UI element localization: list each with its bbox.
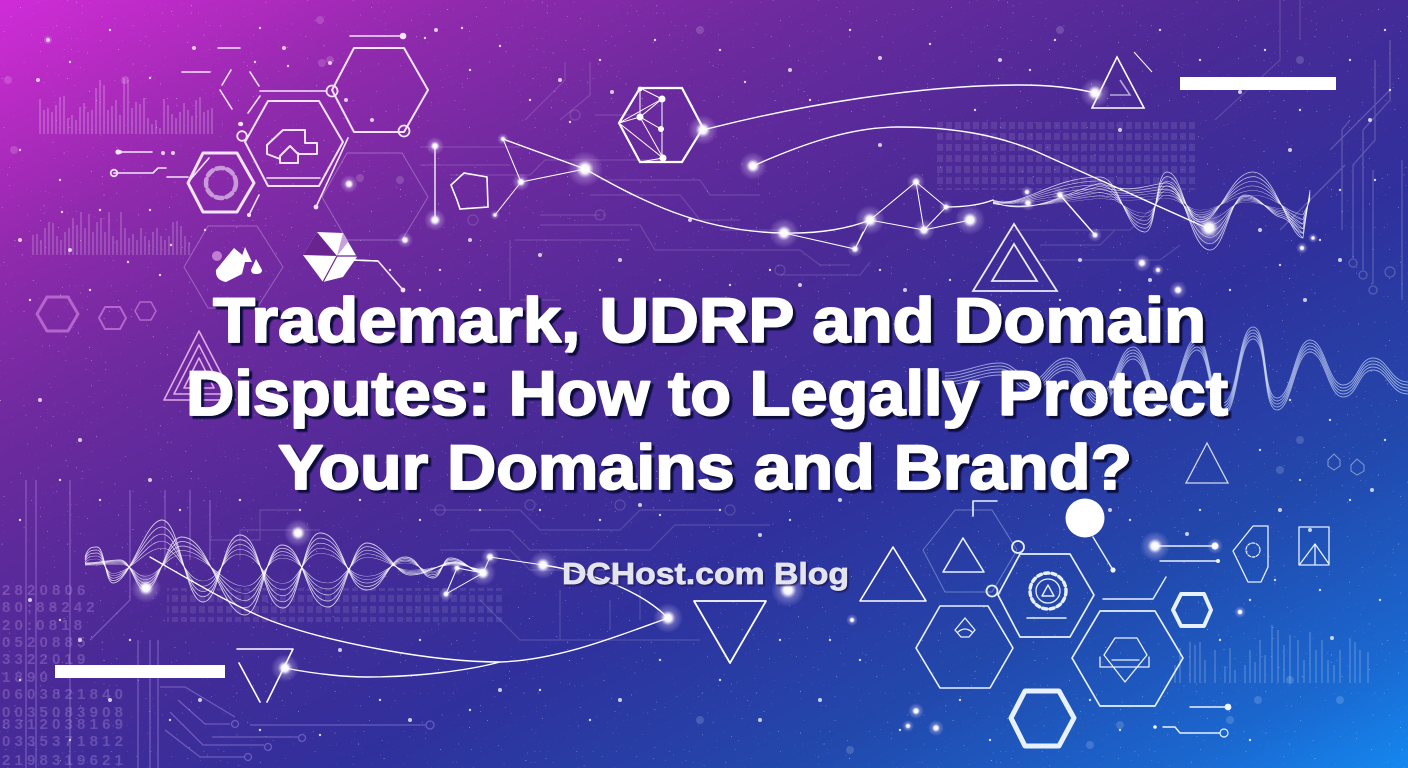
- blob outline: [451, 173, 488, 209]
- inverted triangles bottom: [237, 547, 926, 702]
- faint circuit: top right: [1280, 40, 1402, 300]
- faint digit columns: lower left: 0 0 3 5 0 8 3 9 0 8: [2, 704, 123, 721]
- triangle top right: [1092, 52, 1152, 108]
- glowing nodes: [131, 78, 1318, 736]
- connector lines: [1093, 537, 1228, 733]
- faint hexagons top left: [184, 153, 428, 308]
- wave bundle: top right: [993, 172, 1310, 250]
- icon cluster: bottom right hexagons: [916, 501, 1329, 746]
- signal curves: [503, 85, 1207, 235]
- icon: water drops: [212, 247, 262, 282]
- faint digit columns: lower left: 0 3 3 5 3 7 1 8 1 2: [2, 733, 123, 750]
- title line 1: Trademark, UDRP and Domain: [213, 286, 1206, 356]
- outline hexagons left: [37, 297, 156, 331]
- hexagon with diamond: [1072, 611, 1183, 706]
- faint circuit: lower left: [26, 480, 434, 768]
- connector lines: [114, 36, 403, 290]
- thick hexagons: [1173, 594, 1211, 626]
- faint digit columns: lower left: 0 5 2 0 8 8 5: [2, 634, 85, 651]
- vertical marker with blob: [434, 146, 436, 220]
- title line 2: Disputes: How to Legally Protect: [186, 359, 1228, 429]
- rings: [1012, 541, 1024, 553]
- large white dot: [1066, 498, 1104, 538]
- faint square grid: top right: [935, 120, 1195, 190]
- faint digit columns: lower left: 2 0 : 0 8 1 8: [2, 617, 82, 634]
- triangle center right: [973, 224, 1057, 291]
- hexagon with gear: [998, 554, 1094, 637]
- faint digit columns: lower left: 8 0 ; 8 8 2 4 2: [2, 599, 95, 616]
- subtitle: blog name: DCHost.com Blog: [562, 556, 849, 591]
- shield icon: [1233, 526, 1268, 582]
- icon: segmented hexagon: [303, 232, 378, 282]
- wave bundle: bottom left: [85, 520, 483, 615]
- network: upper center: [435, 85, 1207, 249]
- faint digit columns: lower left: 1 8 9 0: [2, 669, 48, 686]
- faint bar chart: mid left: [33, 212, 189, 255]
- hexagon small thick: [188, 153, 254, 212]
- white bar top right: [1180, 77, 1336, 90]
- node links: [495, 139, 970, 249]
- title: [186, 286, 1228, 503]
- joint rings: [111, 86, 409, 176]
- faint bar chart: upper left: [40, 78, 212, 134]
- faint digit columns: lower left: 8 3 1 2 0 3 8 1 6 9: [2, 716, 123, 733]
- line end dots: top left: [115, 33, 406, 292]
- wave bundle: mid right: [945, 327, 1408, 415]
- outlined triangle right: [1186, 443, 1228, 483]
- faint bar chart: bottom right: [1175, 625, 1368, 683]
- emblem glyph: [267, 130, 317, 163]
- mesh hexagon icon: [619, 87, 703, 162]
- hexagon outline large: [332, 48, 428, 132]
- framed triangle icon: [1299, 527, 1329, 565]
- faint digit columns: lower left: 3 3 2 2 0 1 9: [2, 651, 85, 668]
- end dots: bottom right: [1110, 542, 1231, 729]
- faint digit columns: lower left: 0 6 0 3 8 2 1 8 4 0: [2, 686, 123, 703]
- network: bottom left curves: [150, 557, 668, 677]
- faint digit columns: lower left: [2, 582, 123, 768]
- white bar bottom left: [55, 665, 225, 678]
- faint circuit: upper center: [420, 0, 1300, 300]
- dashed ring icon: [206, 168, 236, 198]
- hexagon with small emblem: [916, 606, 1013, 688]
- hexagon outline with emblem: [245, 101, 343, 186]
- small faint hexagons right: [1328, 454, 1364, 475]
- faint square grid: lower left: [167, 588, 502, 622]
- faint hexagon with triangle: [923, 510, 1017, 592]
- faint digit columns: lower left: 2 8 2 0 8 0 6: [2, 582, 85, 599]
- faint circuit: lower center: [210, 500, 770, 640]
- icon cluster: top left hexagons: [111, 36, 428, 290]
- concentric triangle left: [164, 331, 235, 400]
- title line 3: Your Domains and Brand?: [278, 433, 1132, 503]
